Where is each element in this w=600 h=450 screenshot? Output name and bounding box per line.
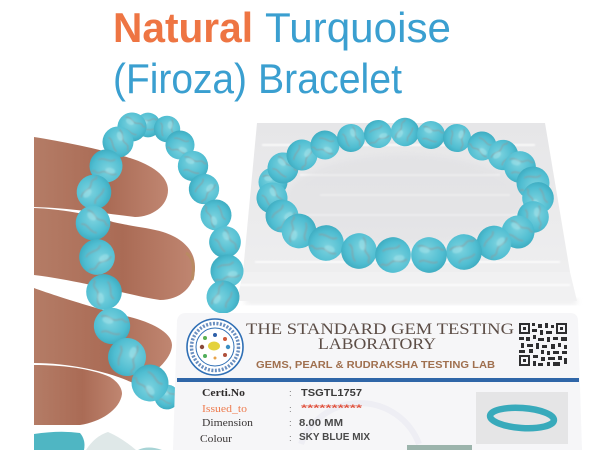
- field: issued to: :: [289, 404, 292, 415]
- hand holding bracelet: [34, 107, 247, 450]
- certificate card: [173, 313, 582, 450]
- bracelet on slab: [251, 113, 558, 276]
- title word: Turquoise: Turquoise: [265, 4, 451, 51]
- field: certificate number: [202, 388, 362, 399]
- finger 3: [34, 288, 172, 383]
- fingernail: [186, 253, 193, 280]
- certificate product photo: [476, 392, 568, 444]
- field: dimension: Dimension: [202, 418, 254, 429]
- original badge: [407, 445, 472, 450]
- QR code: [519, 323, 567, 366]
- slab top surface: [243, 123, 570, 272]
- slab shadow: [245, 299, 577, 304]
- title word: Natural: Natural: [113, 4, 253, 51]
- field: dimension: [202, 418, 343, 429]
- card background: [173, 313, 582, 450]
- title word: (Firoza): (Firoza): [113, 55, 247, 102]
- title: [113, 4, 451, 102]
- loose stones at bottom: [34, 432, 162, 450]
- title word: Bracelet: Bracelet: [258, 55, 402, 102]
- finger 1: [34, 137, 168, 217]
- lab seal logo: [187, 319, 243, 375]
- front beads of held bracelet: [69, 122, 176, 409]
- field: issued to: **********: [301, 403, 362, 414]
- field: dimension: :: [289, 418, 292, 429]
- lab name: [246, 321, 515, 353]
- inner bracelet shadow: [285, 155, 525, 245]
- lab name line 2: LABORATORY: [318, 336, 436, 353]
- field: certificate number: :: [289, 388, 292, 399]
- blue divider bar: [177, 378, 579, 382]
- finger 4: [34, 365, 122, 425]
- slab streaks: [240, 145, 570, 285]
- back beads of held bracelet: [112, 107, 247, 414]
- lab name line 1: THE STANDARD GEM TESTING: [246, 321, 515, 338]
- finger 2: [34, 208, 195, 300]
- field: issued to: Issued_to: [202, 404, 247, 415]
- slab front face: [237, 272, 577, 301]
- field: certificate number: TSGTL1757: [301, 388, 362, 399]
- faint watermark seal: [301, 403, 419, 444]
- field: dimension: 8.00 MM: [299, 418, 343, 429]
- selenite slab with bracelet: [237, 113, 577, 304]
- field: colour: Colour: [200, 434, 233, 445]
- field: certificate number: Certi.No: [202, 388, 245, 399]
- lab subtitle: GEMS, PEARL & RUDRAKSHA TESTING LAB: [256, 359, 495, 371]
- field: colour: SKY BLUE MIX: [299, 432, 370, 443]
- field: issued to: [202, 403, 362, 415]
- field: colour: [200, 432, 370, 445]
- field: colour: :: [289, 433, 292, 444]
